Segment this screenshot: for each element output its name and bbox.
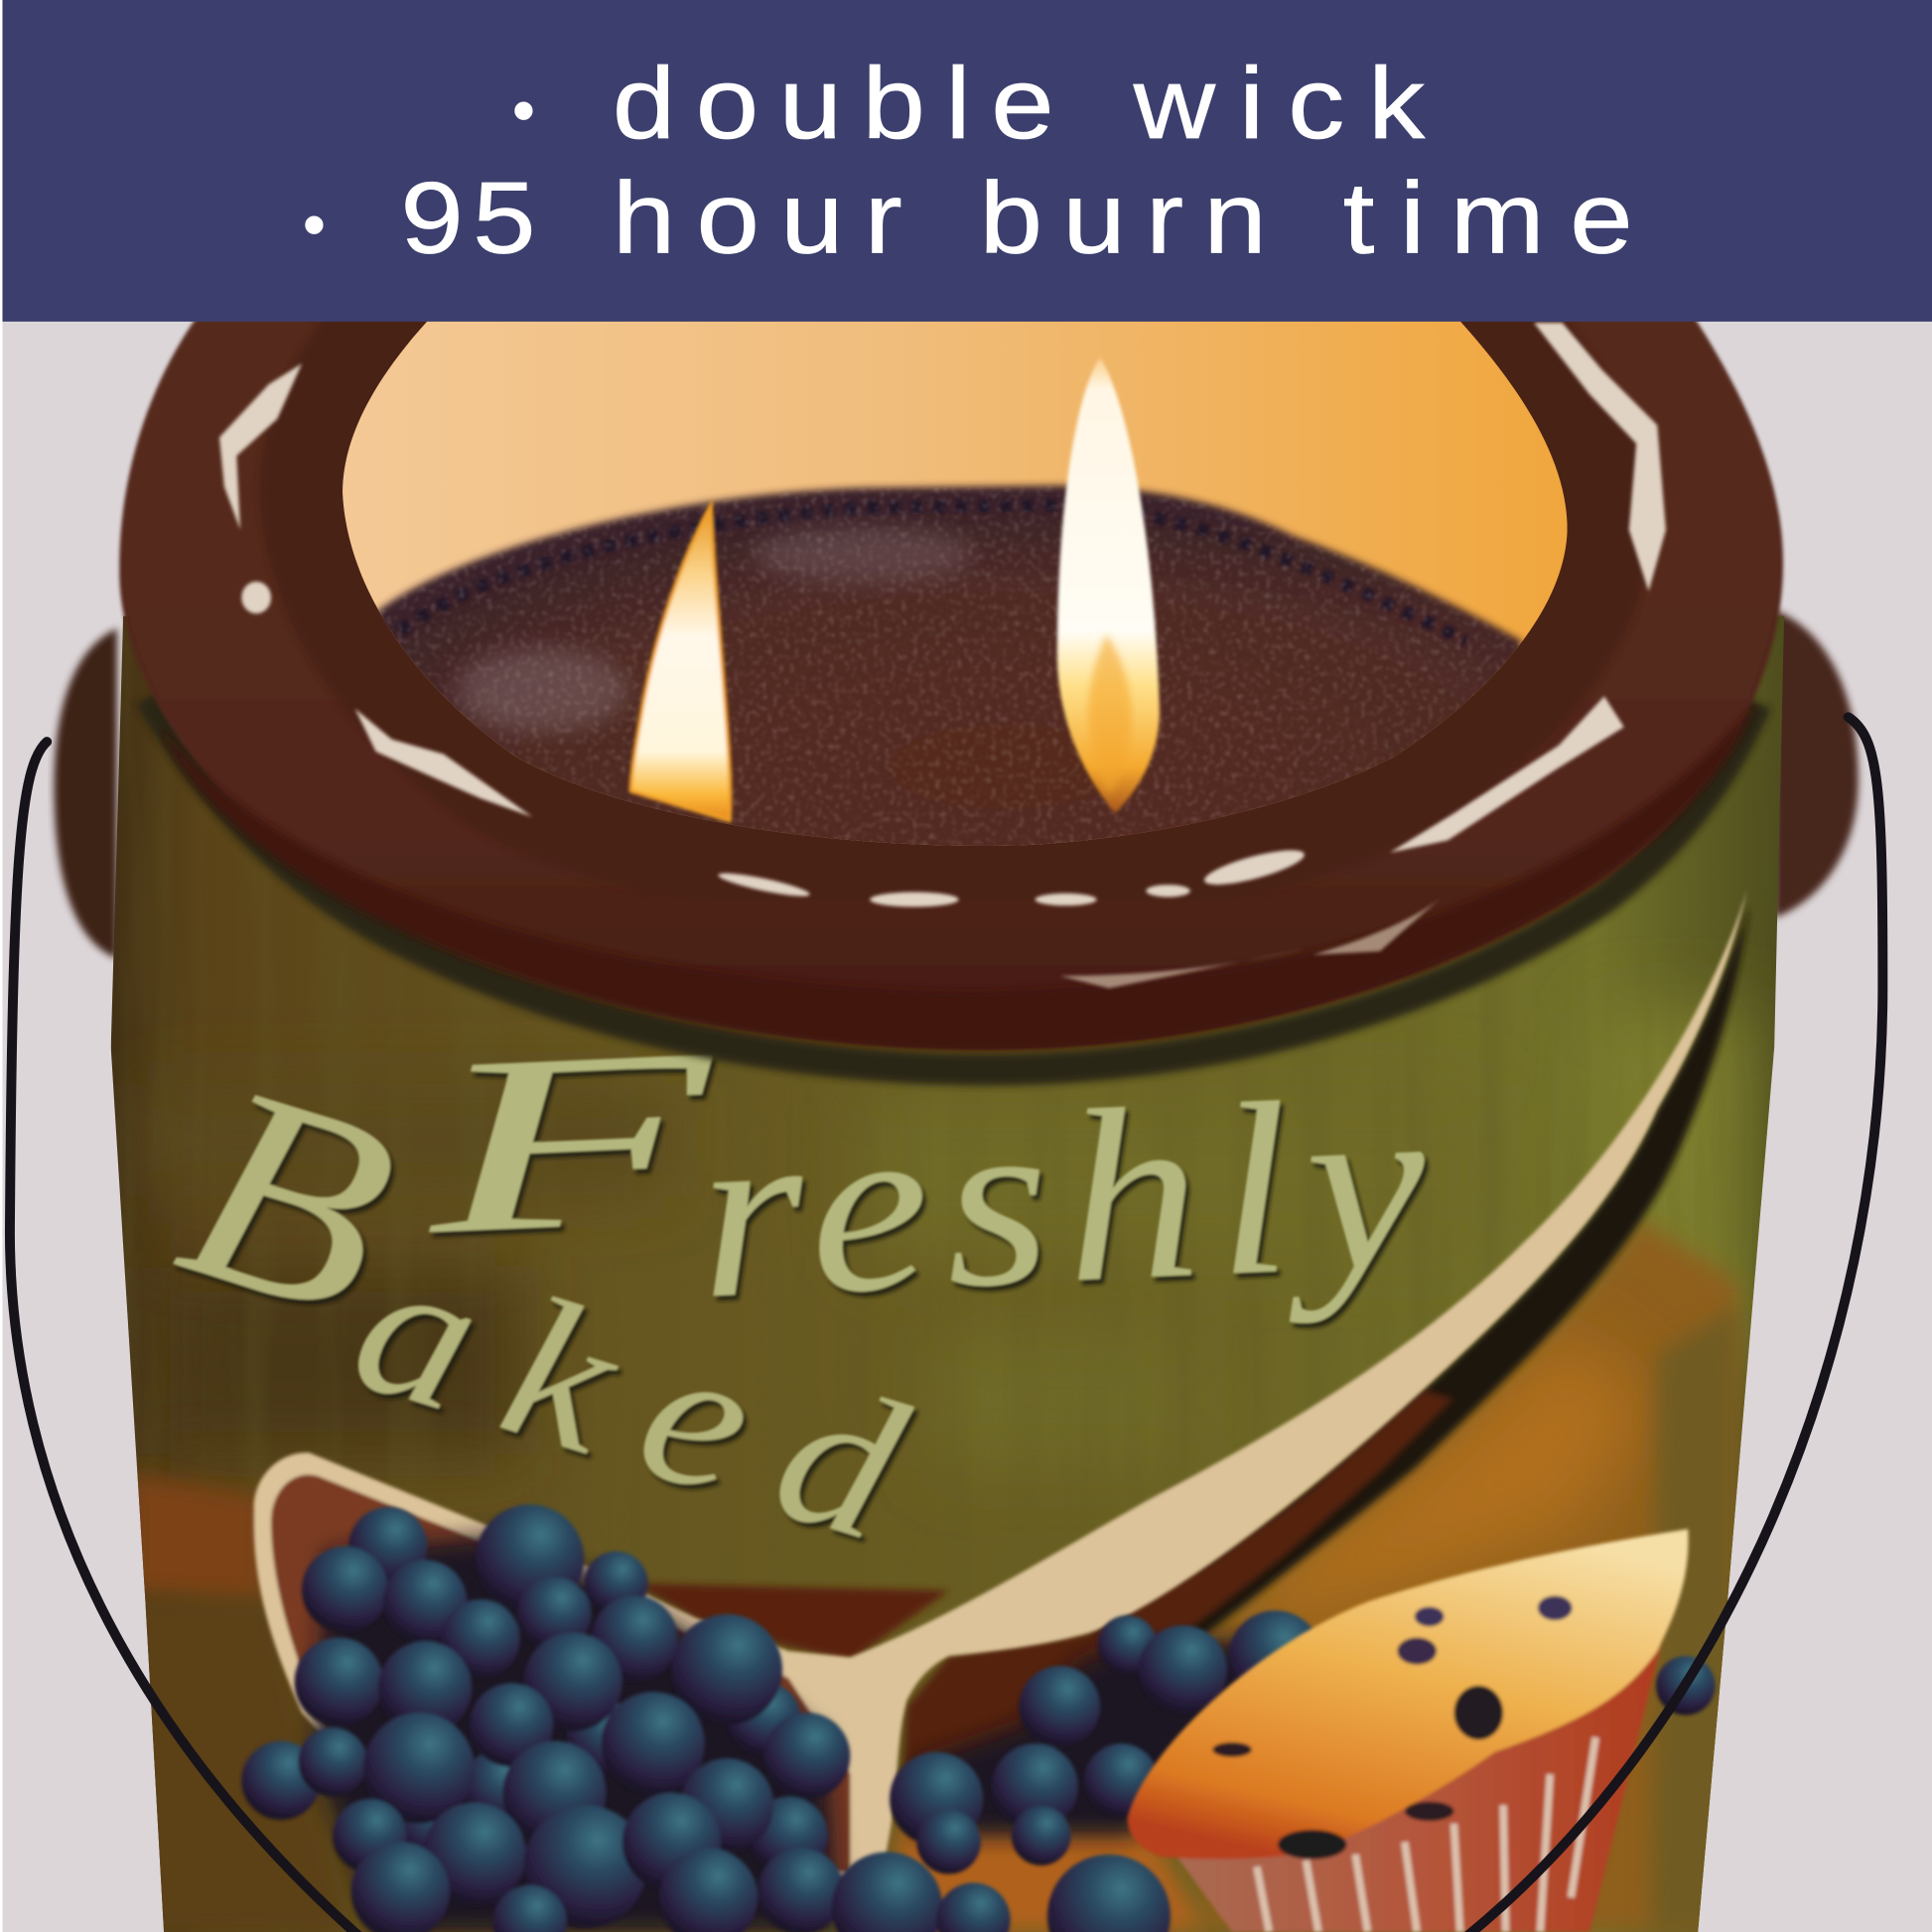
- muffin top: [1128, 1529, 1689, 1860]
- handle left: [10, 742, 359, 1932]
- rim chipped highlights: [219, 323, 1666, 988]
- jar text: Baked: [152, 1022, 968, 1596]
- banner background: [2, 0, 1932, 322]
- candle interior: [343, 322, 1568, 846]
- banner text: •: [512, 74, 535, 146]
- jar text: Baked: B: [152, 1022, 426, 1377]
- jar text: Freshly: [414, 995, 1448, 1350]
- wood shading patches: [148, 1011, 1749, 1466]
- rim outer: [119, 308, 1783, 1049]
- banner: [2, 0, 1932, 322]
- banner text: 95: [400, 161, 536, 274]
- maroon band under olive: [634, 1584, 949, 1661]
- icon: left handle lug: [54, 628, 117, 959]
- wax edge beading: [400, 505, 1466, 640]
- lower band left: [129, 1472, 265, 1601]
- blueberries: [241, 1504, 1716, 1932]
- spoon shadow: [1090, 905, 1749, 1676]
- candle jar body: [98, 617, 1799, 1932]
- banner text: double: [613, 47, 1054, 160]
- banner text: burn: [980, 161, 1267, 274]
- banner text: hour: [613, 161, 902, 274]
- banner text: wick: [1133, 47, 1426, 160]
- spoon: [254, 890, 1747, 1885]
- muffin wrapper: [1171, 1645, 1661, 1932]
- bucket handle: [10, 717, 1882, 1932]
- muffin: [1128, 1529, 1689, 1932]
- left flame: [630, 505, 731, 821]
- right flame core: [1088, 634, 1132, 794]
- jar inner wall: [333, 296, 1578, 863]
- rim shadow lip: [150, 696, 1756, 1069]
- wax highlight: [456, 648, 628, 732]
- jar text: Freshly: reshly: [693, 1045, 1448, 1350]
- jar rim: [119, 308, 1783, 1069]
- banner text: [303, 47, 1633, 274]
- right flame: [1057, 357, 1160, 813]
- rim inner groove: [343, 314, 1568, 846]
- maroon under spoon: [899, 1390, 1453, 1824]
- spoon handle and bowl rim: [254, 890, 1747, 1885]
- wax surface: [376, 485, 1522, 888]
- lower wood right: [1171, 1220, 1737, 1932]
- jar text: Baked: aked: [332, 1206, 968, 1596]
- vertical wood grain: [122, 1216, 253, 1370]
- rim front lip shading: [160, 702, 1756, 1049]
- icon: right handle lug: [1774, 610, 1859, 918]
- jar text: Freshly: F: [414, 995, 726, 1287]
- handle right: [1466, 717, 1882, 1932]
- berry shadows: [314, 1534, 1294, 1932]
- wax speckle: [380, 485, 1521, 845]
- banner text: time: [1343, 161, 1633, 274]
- spoon bowl interior: [271, 1474, 850, 1872]
- banner text: •: [303, 189, 326, 260]
